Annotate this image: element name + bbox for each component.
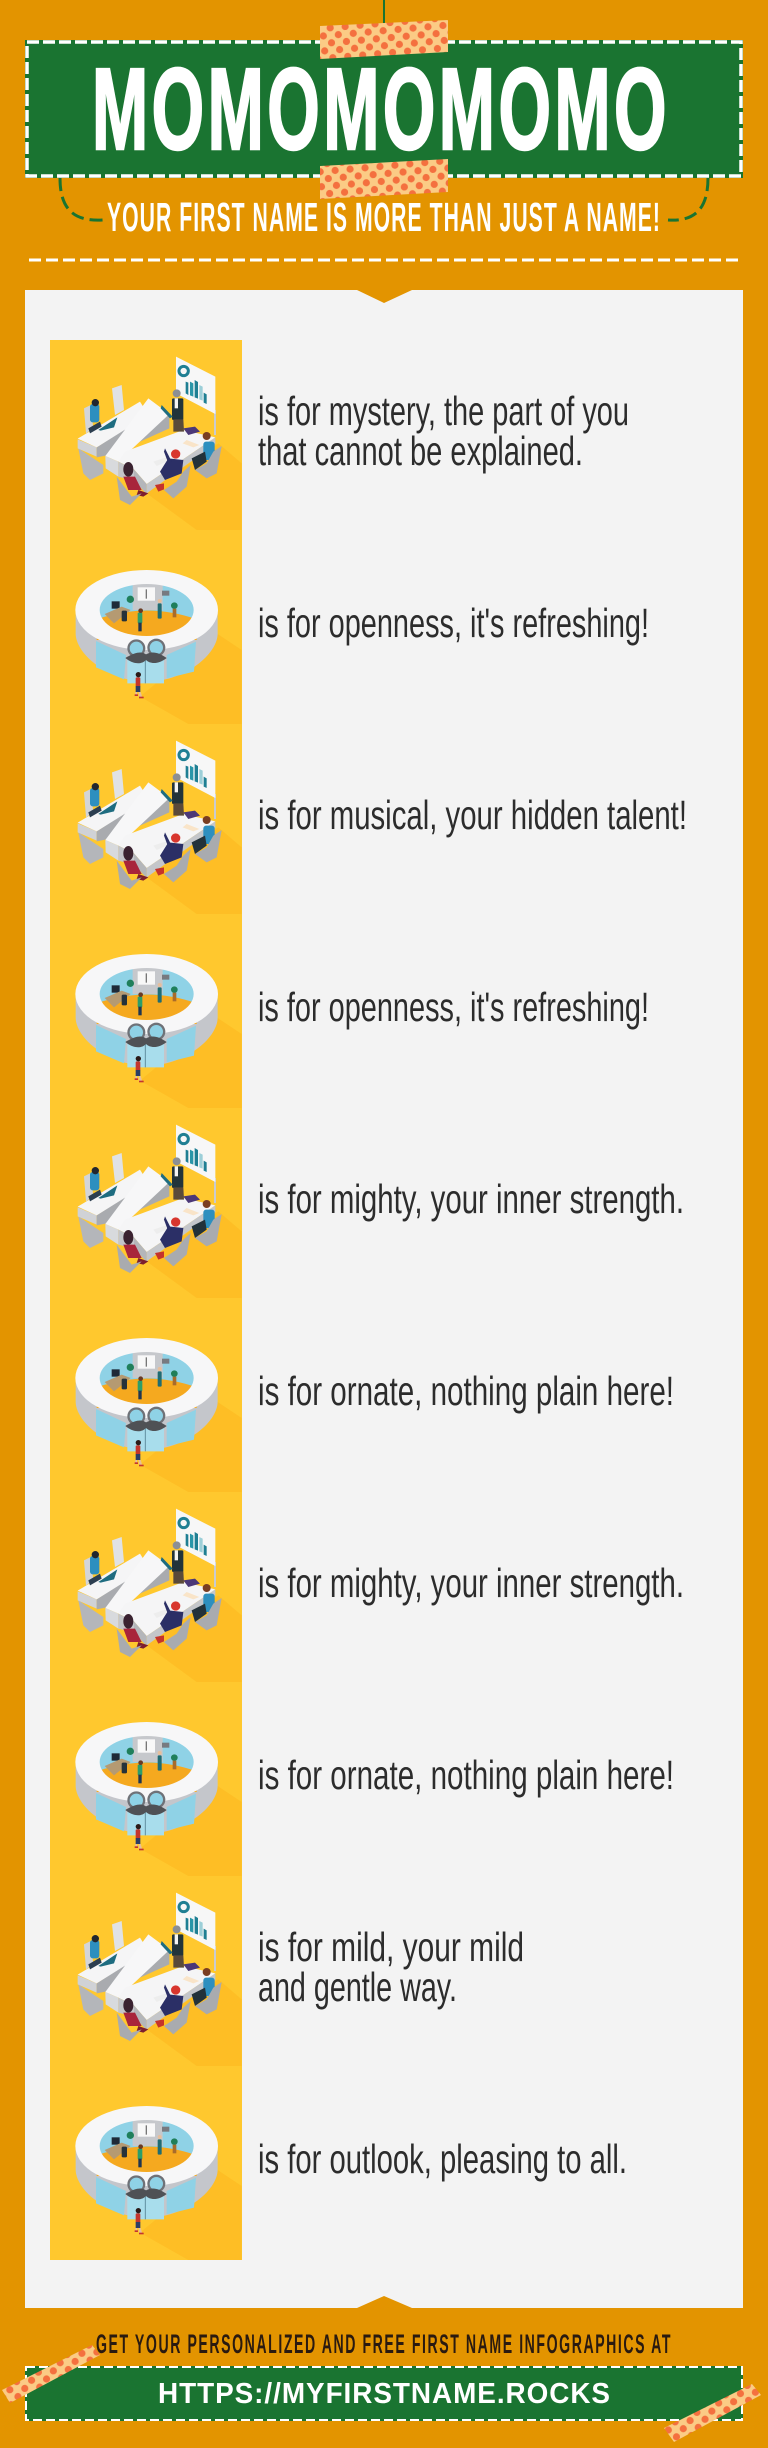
icon: meeting desk 1 (78, 357, 242, 530)
bottom tape (320, 159, 448, 199)
right dashed connector (668, 178, 708, 220)
footer green panel (25, 2366, 743, 2421)
footer dashed border (26, 2367, 742, 2420)
icon: optician ring 5 (75, 2106, 242, 2260)
text: row 1: is for mystery, the part of you (258, 388, 629, 434)
dashed border (27, 42, 741, 176)
icon: meeting desk 4 (78, 1509, 242, 1682)
text: row 10: is for outlook, pleasing to all. (258, 2136, 627, 2182)
text: row 9: is for mild, your mild (258, 1924, 524, 1970)
text: row 9 (258, 1924, 524, 2010)
main white panel (25, 290, 743, 2308)
left footer tape (2, 2345, 100, 2403)
yellow illustration column (50, 340, 242, 2260)
green title panel (25, 40, 743, 178)
footer banner (2, 2345, 761, 2442)
right footer tape (664, 2384, 761, 2442)
left dashed connector (60, 178, 103, 220)
icon: optician ring 1 (75, 570, 242, 724)
text: row 9: and gentle way. (258, 1964, 457, 2010)
footer url: HTTPS://MYFIRSTNAME.ROCKS (158, 2378, 611, 2410)
icon: meeting desk 2 (78, 741, 242, 914)
icon: optician ring 4 (75, 1722, 242, 1876)
top tape (320, 20, 448, 59)
text: row 1 (258, 388, 629, 474)
icon: meeting desk 3 (78, 1125, 242, 1298)
text: row 1: that cannot be explained. (258, 428, 583, 474)
icon: optician ring 2 (75, 954, 242, 1108)
icon: optician ring 3 (75, 1338, 242, 1492)
icon: meeting desk 5 (78, 1893, 242, 2066)
hanging thread (383, 0, 385, 25)
header banner (25, 0, 743, 199)
